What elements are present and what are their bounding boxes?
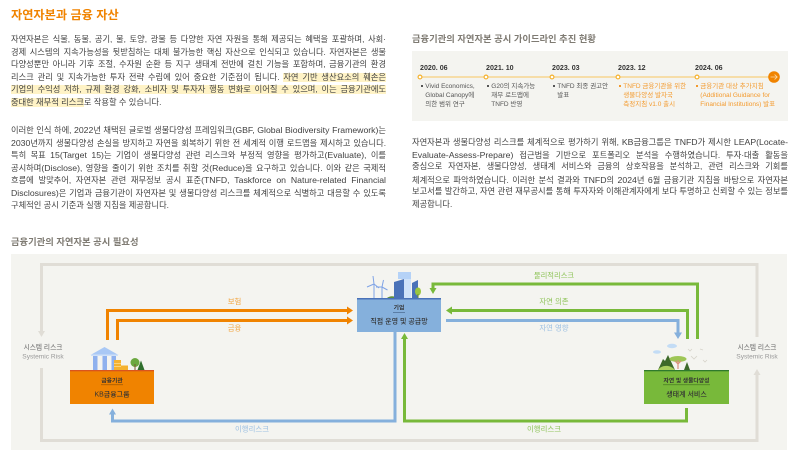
milestone 2024.06: (Additional Guidance for — [700, 92, 770, 98]
box: company: 기업 — [394, 304, 404, 312]
text block: GBF and TNFD background: 2030년까지 생물다양성 손실을 방지하고 자연을 회복하기 위한 전 세계적 이행 로드맵을 제시하고 있습니다. — [11, 138, 386, 148]
label: systemic risk right: Systemic Risk — [736, 354, 778, 360]
panel: disclosure diagram — [11, 254, 787, 450]
icon: wind turbines and city buildings — [367, 272, 421, 298]
box: financial institution: KB금융그룹 — [94, 390, 130, 398]
text block: natural capital intro: 다양성뿐만 아니라 기후 조절, 수자원 순환 등 지구 생태계 전반에 걸친 기능을 포함하며, 금융기관의 환경 — [11, 60, 386, 69]
text block: KB approach: 보고서를 발간하고, 자연 관련 재무공시를 통해 투자자와 이해관계자에게 보다 투명하고 신뢰할 수 있는 정보를 — [412, 187, 788, 196]
text block: natural capital intro: 중대한 재무적 리스크로 작용할 수 있습니다. — [11, 98, 161, 107]
label: transition risk green: 이행리스크 — [527, 424, 561, 434]
text block: KB approach — [412, 137, 788, 209]
arrow: transition risk blue — [109, 332, 395, 421]
arrow: nature dependency — [446, 306, 688, 339]
text block: GBF and TNFD background: 이러한 인식 하에, 2022년 채택된 글로벌 생물다양성 프레임워크(GBF, Global Biodiversity Framework)는 — [11, 125, 386, 135]
box: financial institution: 금융기관 — [101, 376, 123, 384]
milestone 2023.12: TNFD 금융기관을 위한 — [623, 82, 686, 90]
label: systemic risk left — [22, 342, 64, 360]
text block: KB approach: 자연자본과 생물다양성 리스크를 체계적으로 평가하기 위해, KB금융그룹은 TNFD가 제시한 LEAP(Locate- — [412, 137, 788, 147]
panel: guideline timeline — [412, 51, 788, 121]
label: nature dependency: 자연 의존 — [539, 297, 569, 306]
arrow: insurance — [108, 306, 353, 340]
label: transition risk blue: 이행리스크 — [235, 424, 269, 434]
title: natural capital and financial assets: 자연자본과 금융 자산 — [11, 8, 119, 22]
timeline line — [418, 71, 780, 83]
box: company — [357, 298, 441, 332]
text block: GBF and TNFD background: Disclosures)은 기업과 금융기관이 자연자본 및 생물다양성 리스크를 체계적으로 식별하고 대응할 수 있도록 — [11, 188, 386, 198]
milestone 2020.06: Global Canopy에 — [425, 92, 474, 98]
arrow: systemic risk lower loop — [42, 368, 760, 440]
box: nature and biodiversity: 생태계 서비스 — [666, 390, 707, 398]
text block: GBF and TNFD background: 공시하며(Disclose), 영향을 줄이기 위한 조치를 취할 것(Reduce)을 요구하고 있습니다. 이와 같은 국제적 — [11, 163, 386, 173]
milestone 2020.06: 2020. 06 — [420, 64, 448, 72]
text block: GBF and TNFD background: 구체적인 공시 기준과 실행 지침을 제공합니다. — [11, 201, 169, 210]
heading: guideline status: 금융기관의 자연자본 공시 가이드라인 추진 현황 — [412, 34, 596, 44]
milestone 2020.06: 의한 범위 연구 — [425, 100, 465, 108]
arrow: nature impact — [446, 320, 682, 339]
milestone 2021.10 — [486, 64, 535, 108]
text block: natural capital intro: 기업의 수익성 저하, 규제 환경 강화, 소비자 및 투자자 행동 변화로 이어질 수 있으며, 이는 금융기관에도 — [11, 85, 386, 94]
text block: natural capital intro: 경제 시스템의 지속가능성을 뒷받침하는 대체 불가능한 핵심 자산으로 인식되고 있습니다. 자연자본은 생물 — [11, 48, 386, 57]
label: nature impact: 자연 영향 — [539, 324, 569, 332]
text block: KB approach: 제공합니다. — [412, 200, 452, 209]
milestone 2023.03 — [552, 64, 608, 98]
text block: GBF and TNFD background: 특히 목표 15(Target 15)는 기업이 생물다양성 관련 리스크와 부정적 영향을 평가하고(Evaluate), 이를 — [11, 150, 386, 160]
milestone 2023.03: TNFD 최종 권고안 — [557, 82, 608, 90]
label: physical risk: 물리적리스크 — [534, 271, 574, 280]
milestone 2023.12 — [618, 64, 686, 108]
arrow: transition risk green — [401, 333, 686, 421]
label: systemic risk left: 시스템 리스크 — [24, 342, 62, 352]
label: systemic risk right: 시스템 리스크 — [738, 342, 776, 352]
milestone 2024.06 — [695, 64, 775, 108]
heading: need for disclosure: 금융기관의 자연자본 공시 필요성 — [11, 237, 138, 247]
text block: KB approach: 중심으로 자연자본, 생물다양성, 생태계 서비스와 금융의 상호작용을 분석하고, 관련 리스크와 기회를 — [412, 162, 788, 171]
arrow: physical risk — [430, 284, 698, 339]
text block: KB approach: 체계적으로 파악하였습니다. 이러한 분석 결과와 TNFD의 2024년 6월 금융기관 지침을 바탕으로 자연자본 — [412, 175, 788, 185]
milestone 2020.06 — [420, 64, 475, 108]
milestone 2024.06: Financial Institutions) 발표 — [700, 100, 775, 108]
text block: natural capital intro — [11, 34, 386, 107]
box: nature and biodiversity — [644, 370, 729, 404]
milestone 2024.06: 2024. 06 — [695, 64, 723, 72]
icon: bank with coins and trees — [90, 347, 144, 370]
text block: natural capital intro: 리스크 관리 및 지속가능한 투자 전략 수립에 있어 중요한 기준점이 됩니다. 자연 기반 생산요소의 훼손은 — [11, 73, 386, 82]
milestone 2024.06: 금융기관 대상 추가지침 — [700, 82, 764, 90]
milestone 2023.03: 2023. 03 — [552, 64, 580, 72]
label: insurance: 보험 — [228, 297, 241, 306]
milestone 2021.10: TNFD 반영 — [491, 100, 522, 108]
icon: forest with clouds and birds — [653, 344, 707, 370]
milestone 2021.10: 2021. 10 — [486, 64, 514, 72]
box: financial institution — [70, 370, 154, 404]
milestone 2021.10: G20의 지속가능 — [491, 82, 535, 90]
arrow: finance — [118, 316, 353, 340]
milestone 2023.03: 발표 — [557, 92, 569, 98]
arrow: systemic risk upper loop — [38, 264, 757, 337]
text block: natural capital intro: 자연자본은 식물, 동물, 공기, 물, 토양, 광물 등 다양한 자연 자원을 통해 제공되는 혜택을 포괄하며, 사회· — [11, 35, 386, 44]
box: company: 직접 운영 및 공급망 — [370, 316, 428, 326]
label: systemic risk left: Systemic Risk — [22, 354, 64, 360]
milestone 2023.12: 생물다양성 발자국 — [623, 92, 673, 98]
text block: KB approach: Evaluate-Assess-Prepare) 접근법을 기반으로 포트폴리오 분석을 수행하였습니다. 투자·대출 활동을 — [412, 150, 788, 160]
label: finance: 금융 — [228, 324, 241, 332]
milestone 2023.12: 측정지침 v1.0 출시 — [623, 100, 675, 108]
milestone 2023.12: 2023. 12 — [618, 64, 646, 72]
box: nature and biodiversity: 자연 및 생물다양성 — [664, 376, 709, 384]
milestone 2021.10: 재무 로드맵에 — [491, 92, 529, 98]
milestone 2020.06: Vivid Economics, — [425, 82, 475, 90]
label: systemic risk right — [736, 342, 778, 360]
text block: GBF and TNFD background — [11, 125, 386, 210]
text block: GBF and TNFD background: 흐름에 발맞추어, 자연자본 관련 재무정보 공시 표준(TNFD, Taskforce on Nature-related Financial — [11, 175, 386, 185]
